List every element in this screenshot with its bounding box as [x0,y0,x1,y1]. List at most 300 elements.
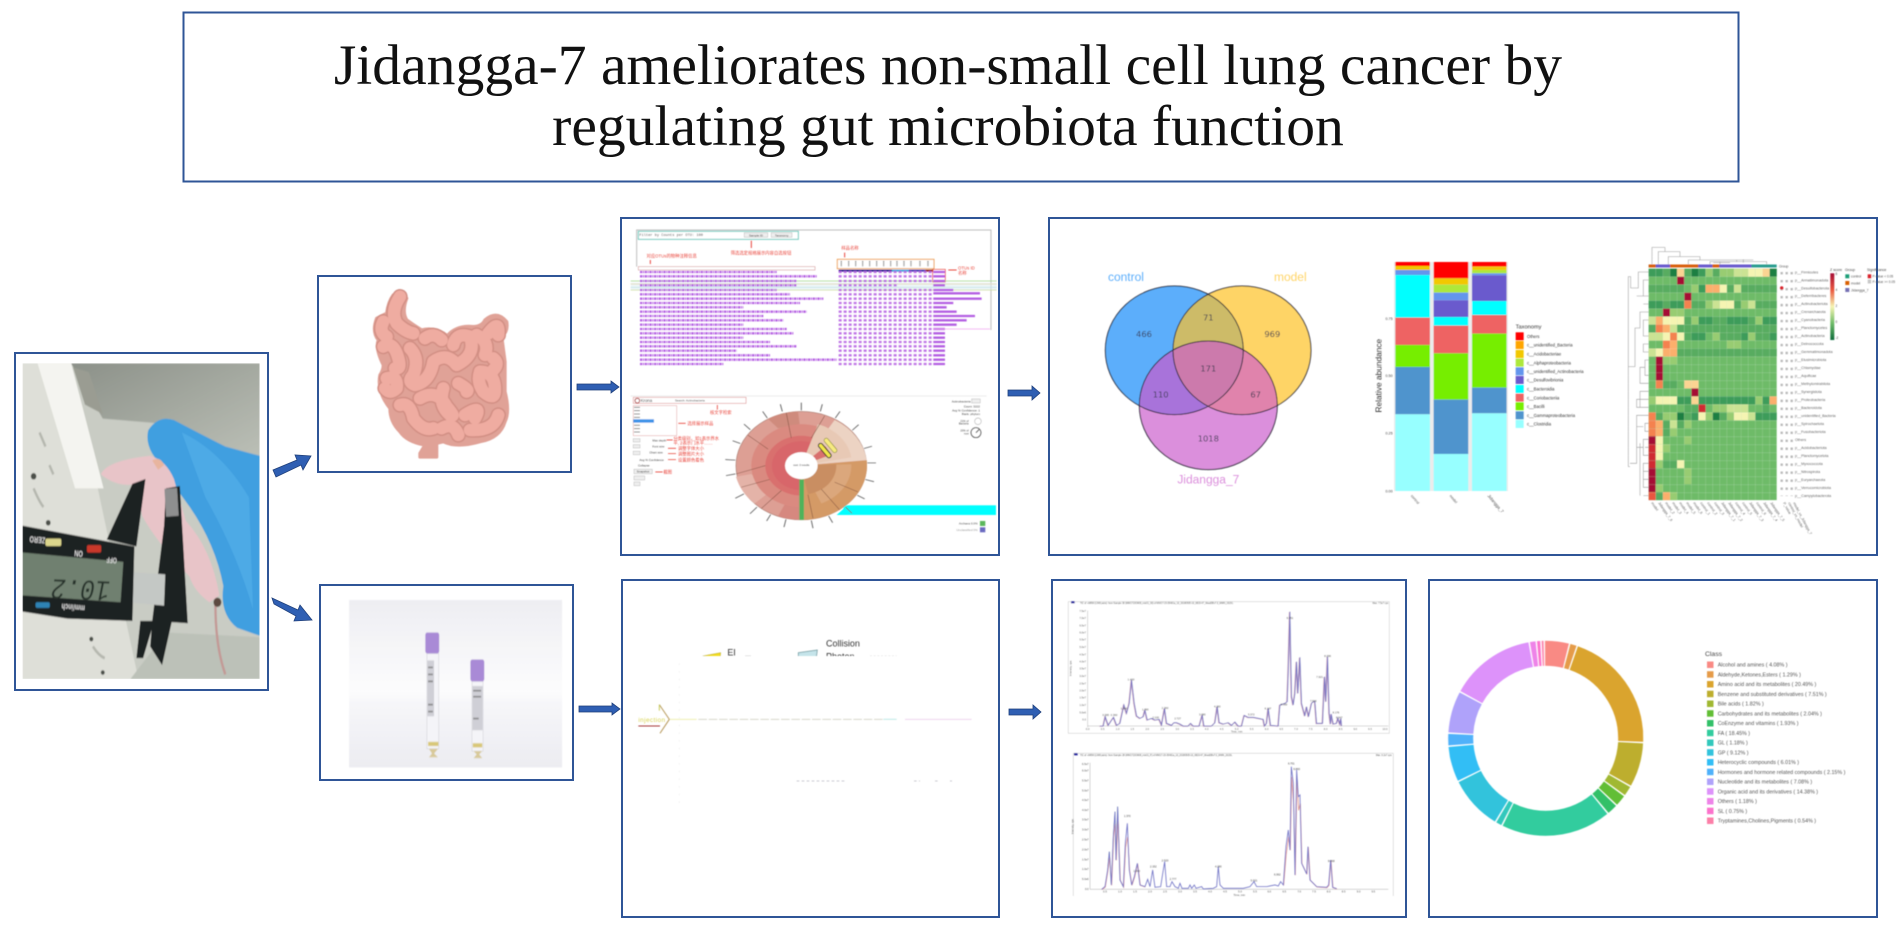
table annotations: OTUs ID [958,266,975,271]
heatmap row labels: p__unidentified_Bacteria [1795,414,1837,418]
chart: stacked bars of relative abundance: 0.25 [1386,431,1393,435]
heatmap row labels: p__Myxococcota [1795,462,1824,466]
heatmap column labels: model_2 [1664,501,1675,515]
chromatogram: lower sample: 4.5e7 [1082,798,1089,802]
chromatogram: lower sample: 8.068 [1328,859,1335,863]
chromatogram: lower sample: 3.0 [1178,890,1182,894]
chromatogram: lower sample: 1.5 [1133,890,1137,894]
chart: Venn diagram: 71 [1203,312,1214,322]
Krona controls: Chart size [649,451,663,455]
chromatogram: lower sample: 5.0e6 [1082,877,1089,881]
heatmap row labels: p__Deinococcota [1795,342,1824,346]
legend: taxonomy: c__Alphaproteobacteria [1527,360,1572,365]
chromatogram: upper sample: 4.5 [1220,727,1224,731]
chromatogram: upper sample: 8.0 [1324,727,1328,731]
chromatogram: lower sample: 8.5 [1342,890,1346,894]
Krona details: Count: 3222 [964,405,980,409]
legend: Z score, group, significance [1830,268,1895,340]
chromatogram: lower sample: 6.751 [1288,761,1295,765]
Krona details: root [964,431,969,435]
chromatogram: upper sample: 2.0 [1145,727,1150,731]
legend: metabolite classes: Aldehyde,Ketones,Esters ( 1.29% ) [1718,672,1801,678]
chromatogram: lower sample: 8.0 [1327,890,1331,894]
chromatogram: lower sample: 2.0e7 [1082,847,1089,851]
OTU table [631,230,997,364]
heatmap row labels: p__Cyanobacteria [1795,318,1826,322]
chromatogram: upper sample: 1.460 [1128,677,1135,681]
legend: metabolite classes: Carbohydrates and its metabolites ( 2.04% ) [1718,711,1822,717]
chromatogram: lower sample: 1.0e7 [1082,867,1089,871]
photo: nude mouse measured with digital caliper [23,363,260,679]
Krona chart [631,396,996,532]
heatmap row labels: p__Desulfobacterota [1795,286,1830,290]
chart: stacked bars of relative abundance: 0.00 [1386,489,1393,493]
legend: taxonomy: c__Acidobacteriae [1527,352,1562,357]
chromatogram: upper sample: 7.5 [1309,727,1313,731]
chromatogram: lower sample: 5.5e7 [1082,778,1089,782]
chart: Venn diagram: Jidangga_7 [1177,473,1240,487]
arrow: intestine to sequencing [577,381,619,393]
legend: Z score, group, significance: Z score [1830,268,1842,272]
legend: metabolite classes: Hormones and hormone related compounds ( 2.15% ) [1718,770,1846,776]
chromatogram: lower sample: 7.5 [1312,890,1316,894]
heatmap row labels: p__Nitrospirota [1795,470,1821,474]
legend: taxonomy: c__Clostridia [1527,422,1552,427]
heatmap column labels: Jidangga_7_6 [1657,501,1673,522]
Krona chart: Unclassified 0% [956,528,978,532]
Krona controls: Collapse [638,464,650,468]
chromatogram: upper sample: 4.5e7 [1079,652,1087,656]
chromatogram: upper sample: 6.551 [1287,616,1294,620]
legend: Z score, group, significance: P-value >= 0.05 [1872,280,1895,284]
chromatogram: upper sample: TIC of +MRM (1348 pairs): from Sample 30 (MW1723/3409_mix01_30) of MW17-23-35401a_10_20180505-10_6823-47_MeatDBv7.0_MWN_20231. [1080,602,1234,605]
ion source and collision labels: Photon [826,651,854,661]
chart: stacked bars of relative abundance: Relative abundance [1373,338,1383,412]
heatmap row labels: p__Actinobacteria [1795,334,1825,338]
Krona controls: 截图 [663,468,672,475]
chromatogram: upper sample: 4.0e7 [1079,660,1087,664]
heatmap column labels: Jidangga_7_3 [1748,501,1764,522]
chromatogram: lower sample: 2.520 [1162,859,1169,863]
Krona controls: 选择展示样品 [687,420,713,427]
Krona controls: 调整字体大小 [678,445,705,452]
heatmap column labels: control_vs_model [1787,502,1804,529]
chromatogram: lower sample: 5.0e7 [1082,788,1089,792]
chromatogram: upper sample: 7.586 [1310,699,1317,703]
table annotations: 对应OTUs的物种注释信息 [647,253,697,260]
heatmap column labels: model [1650,501,1659,512]
chromatogram: lower sample: 6.0e7 [1082,768,1089,772]
heatmap column labels: control_3 [1713,501,1725,516]
ion beam line [670,718,972,721]
chromatogram: upper sample: 3.0 [1175,727,1180,731]
heatmap column labels: model_5 [1685,501,1696,515]
chromatogram: lower sample: 6.362 [1274,873,1281,877]
heatmap row labels: p__Firmicutes [1795,270,1818,274]
chromatogram: upper sample: 0.5 [1101,727,1105,731]
chromatogram: upper sample: 9.0 [1353,727,1358,731]
title: regulating gut microbiota function [552,95,1344,158]
chart: stacked bars of relative abundance: 0.75 [1386,317,1393,321]
chromatogram: upper sample: 0.0 [1086,727,1090,731]
chromatogram: lower sample: 4.0 [1208,890,1212,894]
Krona details: 20% of [960,429,969,433]
heatmap row labels: p__Elusimicrobiota [1795,358,1827,362]
legend: metabolite classes: GP ( 9.12% ) [1718,750,1749,756]
legend: taxonomy: Taxonomy [1516,325,1542,331]
photo: nude mouse measured with digital caliper: ZERO [29,534,46,546]
panel: total ion chromatograms [1052,580,1406,917]
chromatogram: lower sample: 9.5 [1371,890,1376,894]
Krona controls: Search: Actinobacteria [675,399,705,403]
chromatogram: lower sample: 4.5 [1223,890,1227,894]
Krona details [952,399,981,438]
sample inlet [638,705,669,733]
table annotations: 样品名称 [841,245,859,252]
heatmap row labels: p__Planctomycetes [1795,326,1827,330]
heatmap row labels: p__Fusobacteriota [1795,430,1826,434]
heatmap row labels: p__Gemmatimonadota [1795,350,1833,354]
Krona controls: 分类级别，如1表示界水 [673,435,720,442]
legend: taxonomy: c__Bacilli [1527,404,1545,409]
OTU table: Sample ID [749,233,764,237]
chromatogram: lower sample: 1.5e7 [1082,857,1089,861]
legend: Z score, group, significance: Jidangga_7 [1851,288,1869,292]
legend: taxonomy: c__Coriobacteriia [1527,395,1560,400]
caliper readout: 10.2 [51,570,110,604]
legend: taxonomy [1516,325,1584,428]
Krona controls: Avg % Confidence [639,458,664,462]
chromatogram: upper sample: 5.5 [1250,727,1254,731]
ion source and collision labels: EI [727,647,736,657]
chromatogram: upper sample: 3.5e7 [1079,667,1087,671]
legend: metabolite classes: FA ( 18.45% ) [1718,731,1750,737]
Krona details: Avg % Confidence: 1 [952,408,980,412]
chromatogram: upper sample: 1.0e7 [1079,703,1087,707]
legend: Z score, group, significance: 0 [1836,320,1838,324]
legend: metabolite classes [1705,651,1846,825]
heatmap row labels: p__Synergistota [1795,390,1823,394]
photo: nude mouse measured with digital caliper: OFF [106,555,117,564]
Krona details: Rank: phylum [962,412,980,416]
chromatogram: upper sample: 0.395 [1102,713,1110,717]
chromatogram: upper sample: 6.5 [1279,727,1284,731]
chromatogram: upper sample: 1.0 [1116,727,1120,731]
chromatogram: upper sample: 3.5 [1190,727,1194,731]
chart: Venn diagram: 67 [1250,390,1261,400]
legend: taxonomy: c__Desulfovibrionia [1527,378,1564,383]
panel: mouse tumour measurement photo [15,353,268,690]
chromatogram: upper sample: 2.100 [1152,716,1159,720]
chromatogram: upper sample: 4.0 [1205,727,1209,731]
chromatogram: upper sample: 7.0 [1294,727,1298,731]
chromatogram: upper sample: 2.727 [1174,717,1181,721]
heatmap row labels: p__Campylobacterota [1795,494,1832,498]
heatmap row labels: p__Proteobacteria [1795,398,1826,402]
chart: clustered heatmap [1628,247,1895,535]
chromatogram: upper sample: 1.5e7 [1079,696,1087,700]
Krona controls: Font size [652,445,665,449]
chromatogram: upper sample: 6.107 [1265,706,1272,710]
chart: stacked bars of relative abundance: Jidangga_7 [1487,493,1505,514]
chromatogram: upper sample: 1.890 [1142,708,1149,712]
chromatogram: lower sample: 3.5e7 [1082,818,1089,822]
chromatogram: lower sample: Time, min [1234,893,1246,897]
legend: Z score, group, significance: 6 [1836,272,1838,276]
chart: Venn diagram: 171 [1200,364,1216,374]
chromatogram: lower sample: 2.5 [1163,890,1167,894]
photo: two purple-capped tubes [349,600,562,767]
heatmap column labels: Jidangga_7_2 [1727,501,1743,522]
chromatogram: upper sample: 2.0e7 [1079,688,1087,692]
heatmap column labels: model_vs_Jidangga_7 [1792,502,1813,535]
Krona controls: 调整图片大小 [678,450,705,457]
legend: metabolite classes: Bile acids ( 1.82% ) [1718,702,1764,708]
heatmap significance markers [1780,272,1792,496]
panel: microbiome diversity charts [1049,218,1895,555]
chromatogram: upper sample: Intensity, cps [1069,660,1073,676]
panel: blood collection tubes [320,585,573,780]
panel: metabolite class donut chart [1429,580,1877,917]
chromatogram: lower sample: 3.5 [1193,890,1197,894]
chromatogram: lower sample: 2.0 [1148,890,1152,894]
chromatogram: upper sample: 2.5 [1160,727,1165,731]
chromatogram: upper sample: 5.372 [1248,712,1255,716]
chromatogram: upper sample: 7.921 [1316,675,1323,679]
photo: nude mouse measured with digital caliper: ON [74,548,83,559]
chromatogram: lower sample: 4.0e7 [1082,808,1089,812]
heatmap row labels: p__Planctomycetota [1795,454,1829,458]
heatmap row labels: p__Actinobacteriota [1795,302,1829,306]
chromatogram: upper sample: 6.560 [1281,702,1288,706]
legend: metabolite classes: Amino acid and its metabolites ( 20.49% ) [1718,682,1817,688]
chromatogram: upper sample: 3.680 [1199,713,1206,717]
panel: intestine [318,276,571,472]
legend: metabolite classes: Tryptamines,Cholines,Pigments ( 0.54% ) [1718,819,1816,825]
heatmap row labels: p__Bacteroidota [1795,406,1823,410]
heatmap column labels: P_value [1782,502,1792,515]
Krona chart: Archaea 0.0% [959,522,978,526]
chromatogram: upper sample: 3.0e7 [1079,674,1087,678]
heatmap column labels: control_4 [1734,501,1746,516]
panel: mass spectrometry schematic [622,580,999,917]
heatmap row labels: p__Acidobacteriota [1795,446,1828,450]
chart: Venn diagram: model [1274,270,1307,284]
title [184,12,1738,182]
heatmap row labels [1795,270,1837,498]
heatmap row labels: p__Verrucomicrobiota [1795,486,1832,490]
chromatogram: upper sample: 9.5 [1368,727,1372,731]
chromatogram: upper sample: 1.390 [1121,706,1128,710]
chromatogram: upper sample: Time, min [1231,730,1243,734]
chromatogram: lower sample: 2.777 [1170,877,1177,881]
chromatogram: lower sample: 1.840 [1133,869,1140,873]
Krona details: Actinobacteria [952,399,971,403]
chromatogram: lower sample: 6.860 [1293,767,1300,771]
chromatogram: upper sample: 6.0e7 [1079,631,1087,635]
heatmap column labels: Jidangga_7_1 [1720,501,1736,522]
chromatogram: lower sample: 3.0e7 [1082,828,1089,832]
chromatogram: lower sample: 7.0 [1297,890,1302,894]
chromatogram: upper sample: Max. 7.5e7 cps [1373,603,1389,605]
heatmap column labels: Jidangga_7_4 [1762,501,1778,522]
legend: Z score, group, significance: control [1851,274,1861,278]
chromatogram: lower sample: 6.0 [1267,890,1272,894]
chromatogram: upper sample: 5.0e7 [1079,645,1087,649]
heatmap column labels: control_6 [1755,501,1767,516]
chromatogram: lower sample: 5.0 [1238,890,1242,894]
chart: Venn diagram: 969 [1264,329,1280,339]
chart: stacked bars of relative abundance: control [1410,494,1420,505]
Krona chart: root: 0 results [793,464,810,467]
heatmap row labels: p__Aquificae [1795,374,1816,378]
Krona controls: 平, 2表示门水平…… [673,439,713,446]
table annotations: 筛选选定规格展示内容自选按钮 [731,249,792,256]
icon: intestine [375,295,507,457]
heatmap row labels: p__Armatimonadota [1795,278,1829,282]
chromatogram: upper sample: 8.5 [1339,727,1343,731]
heatmap column labels [1650,501,1813,535]
chart: Venn diagram: control [1108,270,1144,284]
chromatogram: lower sample: TIC of +MRM (1348 pairs): from Sample 28 (MW1723/3408_mix01_P) of MW17-23-35401a_10_20180505-10_6823-47_MeatDBv7.0_MWN_20231. [1080,754,1233,757]
heatmap cells [1649,269,1777,500]
chromatogram: upper sample: 0.0 [1082,718,1087,722]
legend: metabolite classes: Class [1705,651,1723,658]
legend: metabolite classes: Alcohol and amines ( 4.08% ) [1718,663,1788,669]
heatmap column labels: model_6 [1692,501,1703,515]
chart: stacked bars of relative abundance: 0.50 [1386,374,1393,378]
chromatogram: upper sample: 8.347 [1336,716,1343,720]
chromatogram: upper sample: 6.0 [1265,727,1269,731]
panel: OTU table and Krona chart [621,218,999,555]
heatmap row labels: p__Crenarchaeota [1795,310,1826,314]
legend: taxonomy: c__Bacteroidia [1527,387,1555,392]
chromatogram: lower sample: 6.5 [1282,890,1287,894]
chromatogram: lower sample: 1.0 [1118,890,1122,894]
heatmap row labels: p__Deferribacteres [1795,294,1827,298]
legend: metabolite classes: Organic acid and its derivatives ( 14.38% ) [1718,789,1818,795]
chromatogram: lower sample: 9.0 [1357,890,1361,894]
legend: Z score, group, significance: 2 [1836,304,1838,308]
legend: metabolite classes: SL ( 0.75% ) [1718,809,1747,815]
legend: metabolite classes: Heterocyclic compounds ( 6.01% ) [1718,760,1799,766]
legend: Z score, group, significance: -2 [1836,336,1839,340]
ion source and collision labels: Collision [826,639,860,649]
heatmap row labels: p__Spirochaetota [1795,422,1825,426]
chromatogram: upper sample: 2.360 [1162,706,1169,710]
arrow: sequencing to diversity charts [1008,386,1040,400]
chromatogram: lower sample: 6.5e7 [1082,762,1089,766]
heatmap row labels: p__Methylomirabilota [1795,382,1831,386]
chromatogram: upper sample: 7.0e7 [1079,616,1087,620]
legend: metabolite classes: Nucleotide and its metabolites ( 7.08% ) [1718,780,1812,786]
heatmap row labels: p__Chlamydiae [1795,366,1821,370]
arrow: photo to blood tube [272,598,312,621]
chromatogram: upper sample: 10.0 [1382,727,1388,731]
chart: stacked bars of relative abundance [1373,262,1508,514]
chart: donut of metabolite classes [1461,653,1631,823]
chromatogram: upper sample: 8.176 [1333,710,1340,714]
heatmap column labels: Jidangga_7_5 [1769,501,1785,522]
heatmap row labels: Others [1795,438,1806,442]
heatmap column labels: control_1 [1699,501,1711,516]
Krona controls: Max depth [652,439,667,443]
chart: Venn diagram: 466 [1136,329,1152,339]
legend: taxonomy: c__Gammaproteobacteria [1527,413,1576,418]
chromatogram: upper sample [1068,601,1389,734]
chromatogram: lower sample: 2.152 [1150,865,1157,869]
chromatogram: upper sample: 5.5e7 [1079,638,1087,642]
Krona controls: 核文字检索 [710,409,732,416]
Krona details: 21% of [960,419,969,423]
table annotations [647,241,975,277]
legend: Z score, group, significance: model [1851,282,1860,286]
arrow: photo to intestine [273,455,311,477]
chromatogram: lower sample: Intensity, cps [1070,818,1074,834]
Krona controls: Krona [641,398,653,403]
Krona controls [633,397,746,486]
chromatogram: lower sample [1070,753,1393,897]
chart: Venn diagram [1105,270,1311,487]
chromatogram: upper sample: 5.0e6 [1079,710,1087,714]
chromatogram: upper sample: 5.0 [1235,727,1239,731]
chart: Venn diagram: 1018 [1198,433,1219,443]
chromatogram: lower sample: 4.280 [1215,864,1222,868]
Krona controls: Snapshot [637,470,649,474]
legend: metabolite classes: CoEnzyme and vitamins ( 1.93% ) [1718,721,1799,727]
heatmap column labels: control_5 [1741,501,1753,516]
arrow: mass spectrometry to chromatograms [1009,705,1041,719]
legend: Z score, group, significance: Group [1845,268,1855,272]
legend: taxonomy: c__unidentified_Actinobacteria [1527,369,1584,374]
heatmap column labels: model_3 [1671,501,1682,515]
chromatogram: lower sample: 5.921 [1251,879,1258,883]
sample inlet: injection [638,717,665,724]
OTU table: Taxonomy [775,233,789,237]
legend: Z score, group, significance: 4 [1836,288,1838,292]
heatmap column labels: control_2 [1706,501,1718,516]
title: Jidangga-7 ameliorates non-small cell lung cancer by [334,34,1562,97]
chromatogram: lower sample: 5.5 [1253,890,1257,894]
heatmap dendrograms [1628,247,1767,496]
heatmap annotation bar [1649,264,1789,268]
chromatogram: upper sample: 2.5e7 [1079,681,1087,685]
legend: metabolite classes: Others ( 1.18% ) [1718,799,1757,805]
legend: Z score, group, significance: P-value < 0.05 [1872,274,1893,278]
chart: Venn diagram: 110 [1153,390,1169,400]
heatmap column labels: model_4 [1678,501,1689,515]
OTU table: Filter by Counts per OTU: 100 [639,233,703,238]
ion source and collision labels [702,639,894,657]
table annotations: 名称 [958,270,967,277]
chromatogram: upper sample: 0.360 [1111,713,1118,717]
chromatogram: lower sample: 2.5e7 [1082,837,1089,841]
heatmap annotation bar: Group [1779,264,1789,268]
legend: taxonomy: Others [1527,334,1539,339]
chromatogram: upper sample: 1.5 [1130,727,1135,731]
chart: stacked bars of relative abundance: model [1449,494,1458,504]
chromatogram: upper sample: 7.5e7 [1079,609,1087,613]
chromatogram: upper sample: 8.096 [1324,654,1331,658]
legend: Z score, group, significance: Significance [1867,268,1886,272]
chromatogram: upper sample: 6.5e7 [1079,623,1087,627]
legend: metabolite classes: Benzene and substituted derivatives ( 7.51% ) [1718,692,1827,698]
chromatogram: lower sample: 1.370 [1124,814,1131,818]
photo: nude mouse measured with digital caliper: mm/inch [61,601,85,614]
chromatogram: lower sample: 0.5 [1103,890,1107,894]
chromatogram: lower sample: Max. 6.2e7 cps [1376,755,1392,757]
legend: taxonomy: c__unidentified_Bacteria [1527,343,1573,348]
